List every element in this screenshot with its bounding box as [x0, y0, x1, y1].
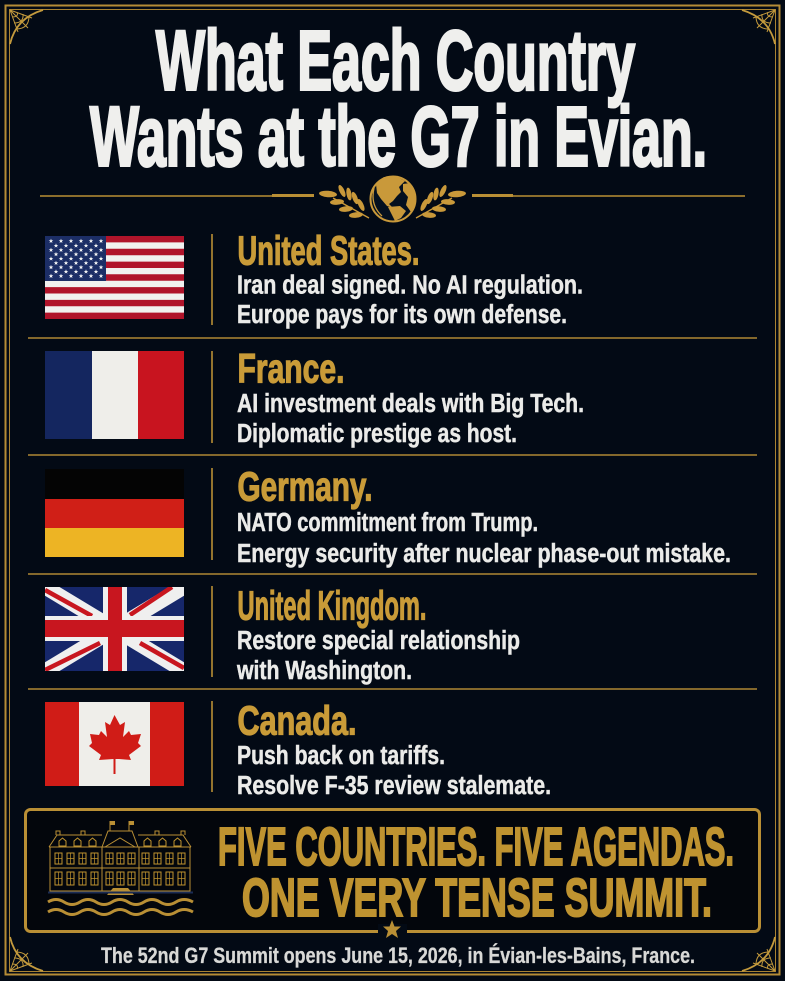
text: United States wants [237, 272, 583, 329]
row: United Kingdom [45, 582, 520, 685]
text: France wants [237, 390, 584, 448]
icon: US flag [45, 236, 184, 319]
row: Germany [45, 464, 731, 568]
icon: globe [370, 176, 416, 222]
text: France wants: Diplomatic prestige as host. [237, 420, 517, 448]
text: United States wants: Iran deal signed. No AI regulation. [237, 272, 583, 300]
heading: United Kingdom: United Kingdom. [238, 582, 426, 628]
row dividers [28, 338, 757, 689]
icon: chateau with water [48, 821, 193, 914]
text: United Kingdom wants: with Washington. [236, 657, 412, 685]
row: Canada [45, 698, 551, 800]
panel: summit banner [26, 810, 760, 932]
icon: left laurel [319, 184, 369, 219]
title [90, 14, 707, 184]
heading: Canada: Canada. [238, 698, 356, 744]
text: United States wants: Europe pays for its own defense. [237, 301, 567, 329]
text: Germany wants [237, 509, 731, 568]
text: United Kingdom wants [236, 627, 520, 685]
heading: United States: United States. [238, 228, 420, 274]
row: United States [45, 228, 583, 329]
text: Canada wants [237, 742, 551, 800]
icon: German flag [45, 469, 184, 557]
callout: banner headline [218, 817, 734, 928]
heading: France: France. [238, 346, 344, 392]
icon: French flag [45, 351, 184, 439]
icon: right laurel [416, 184, 466, 219]
text: Canada wants: Push back on tariffs. [237, 742, 445, 770]
text: Germany wants: NATO commitment from Trump. [237, 509, 538, 537]
text: United Kingdom wants: Restore special relationship [237, 627, 520, 655]
text: Canada wants: Resolve F-35 review stalemate. [237, 772, 551, 800]
heading: Germany: Germany. [238, 464, 372, 510]
icon: star on banner edge [378, 920, 407, 938]
row: France [45, 346, 584, 448]
header divider with globe and laurels [40, 176, 745, 222]
icon: UK flag [45, 587, 184, 671]
text: France wants: AI investment deals with Big Tech. [237, 390, 584, 418]
icon: Canadian flag [45, 702, 184, 786]
